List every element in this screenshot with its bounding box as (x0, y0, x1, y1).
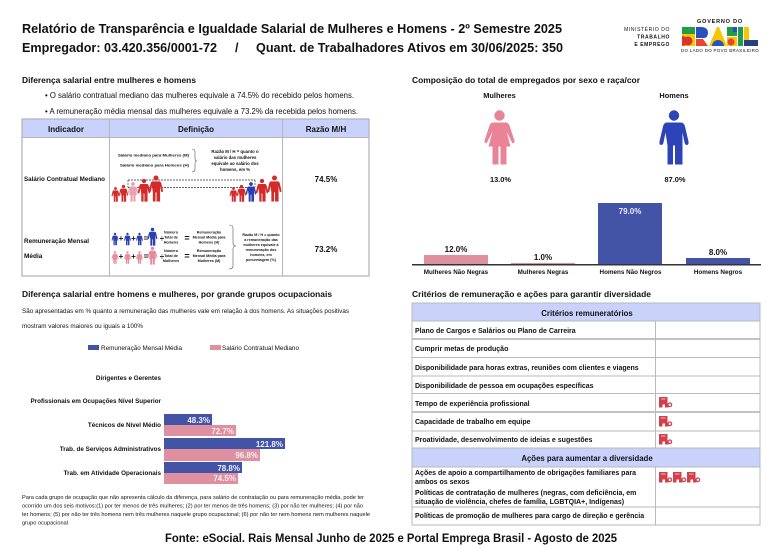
bar chart: grupos ocupacionais: 74.5% (213, 474, 236, 483)
text block: bullets (45, 91, 358, 116)
diagram: remuneração média: + (131, 252, 136, 261)
diagram: remuneração média: + (131, 234, 136, 243)
logo: Ministério do Trabalho e Emprego: E EMPREGO (634, 42, 670, 48)
legend (88, 345, 299, 352)
chart: composição por sexo: 13.0% (490, 175, 511, 184)
legend: Salário Contratual Mediano (222, 345, 299, 352)
text block: nota do gráfico (22, 308, 349, 330)
chart: composição por sexo: 87.0% (665, 175, 686, 184)
diagram: remuneração média: a remuneração das (244, 238, 278, 242)
icon: mulher (484, 110, 515, 164)
diagram: remuneração média: Remuneração (197, 230, 222, 234)
heading: critérios: Critérios de remuneração e ações para garantir diversidade (412, 289, 651, 299)
bar chart: raça/cor: Mulheres Não Negras (424, 269, 489, 276)
table: indicadores: Razão M/H (306, 125, 346, 134)
bar chart: grupos ocupacionais: 96.8% (235, 451, 258, 460)
logo: Governo do Brasil (681, 19, 759, 53)
table: critérios: Proatividade, desenvolvimento de ideias e sugestões (415, 437, 593, 444)
icons: selos ações (659, 472, 700, 482)
diagram: remuneração média: ÷ (160, 234, 165, 243)
bar chart: raça/cor: Homens Não Negros (600, 269, 662, 276)
text block: nota de rodapé: grupo ocupacional (22, 520, 68, 526)
logo: Ministério do Trabalho e Emprego (624, 26, 670, 48)
diagram: remuneração média: ÷ (160, 252, 165, 261)
chart: composição por sexo: Homens (659, 91, 689, 100)
bar chart: grupos ocupacionais: Técnicos de Nível Médio (88, 422, 161, 429)
bar chart: grupos ocupacionais: 48.3% (187, 416, 210, 425)
text block: nota de rodapé: Para cada grupo de ocupação que não apresenta cálculo da diferença, para salário de contratação ou para remuneração média, pode ter (22, 495, 364, 501)
chart: composição por sexo: Mulheres (483, 91, 516, 100)
table: indicadores: 73.2% (315, 245, 337, 254)
table: indicadores: Salário Contratual Mediano (24, 176, 105, 183)
table: critérios: ambos os sexos (415, 479, 470, 486)
diagram: remuneração média: Total de (164, 254, 178, 258)
table: indicadores (22, 119, 369, 276)
logo: Governo do Brasil: GOVERNO DO (697, 19, 743, 25)
logo: Ministério do Trabalho e Emprego: MINISTÉRIO DO (624, 26, 670, 33)
bar chart: raça/cor: 8.0% (709, 248, 727, 257)
title: / (235, 41, 239, 55)
table: critérios: Ações de apoio a compartilhamento de obrigações familiares para (415, 470, 636, 477)
diagram: remuneração média: Homens (164, 240, 178, 244)
text block: nota do gráfico: mostram valores maiores ou iguais a 100% (22, 323, 143, 330)
diagram: remuneração média (112, 225, 280, 269)
diagram: remuneração média: Remuneração (197, 249, 222, 253)
table: critérios: Capacidade de trabalho em equipe (415, 419, 531, 426)
text block: nota de rodapé: ter homens; (5) por não ter três homens nem três mulheres naquele grupo ocupacional; (6) por não ter nem homens nem mulheres naquele (22, 512, 370, 518)
bar chart: raça/cor: Homens Negros (694, 269, 743, 276)
logo: Ministério do Trabalho e Emprego: TRABALHO (637, 34, 670, 40)
diagram: salário mediano: salário das mulheres (214, 155, 257, 160)
title: Relatório de Transparência e Igualdade Salarial de Mulheres e Homens - 2º Semestre 2025 (22, 22, 562, 36)
bar chart: grupos ocupacionais: 72.7% (211, 427, 234, 436)
table: critérios: Políticas de promoção de mulheres para cargo de direção e gerência (415, 513, 644, 520)
bar chart: grupos ocupacionais: Trab. de Serviços Administrativos (60, 446, 161, 453)
diagram: remuneração média: Mulheres (M) (198, 259, 221, 263)
diagram: remuneração média: Mulheres (163, 259, 179, 263)
table: critérios: Tempo de experiência profissional (415, 401, 530, 408)
table: indicadores: Indicador (48, 125, 84, 134)
legend: Remuneração Mensal Média (101, 345, 182, 352)
bar chart: raça/cor (412, 203, 761, 276)
heading: grupos ocupacionais: Diferença salarial entre homens e mulheres, por grande grupos ocupacionais (22, 289, 332, 299)
diagram: salário mediano: Salário mediano para Homens (H) (120, 162, 190, 168)
heading: composição: Composição do total de empregados por sexo e raça/cor (412, 75, 641, 85)
diagram: remuneração média: Total de (164, 236, 178, 240)
diagram: remuneração média: Número (164, 249, 179, 253)
bar chart: raça/cor: 79.0% (619, 207, 641, 216)
heading: diferença salarial: Diferença salarial entre mulheres e homens (22, 75, 196, 85)
bar chart: grupos ocupacionais: Profissionais em Ocupações Nível Superior (30, 398, 162, 405)
title: Empregador: 03.420.356/0001-72 (22, 41, 217, 55)
diagram: remuneração média: = (184, 233, 190, 243)
table: critérios: situação de violência, chefes de família, LGBTQIA+, Indígenas) (415, 499, 624, 506)
diagram: remuneração média: Razão M / H = quanto (242, 233, 280, 237)
diagram: remuneração média: homens, em (250, 253, 272, 257)
text block: bullets: • O salário contratual mediano das mulheres equivale a 74.5% do recebido pelos homens. (45, 91, 354, 100)
diagram: remuneração média: mulheres equivale à (243, 243, 280, 247)
table: critérios: Ações para aumentar a diversidade (521, 454, 653, 463)
icon: selo capacidade (659, 416, 672, 426)
diagram: remuneração média: + (119, 252, 124, 261)
bar chart: raça/cor: 1.0% (534, 253, 552, 262)
diagram: salário mediano (112, 149, 282, 202)
bar chart: grupos ocupacionais (30, 375, 285, 484)
bar chart: grupos ocupacionais: 78.8% (217, 464, 240, 473)
text block: nota do gráfico: São apresentadas em % quanto a remuneração das mulheres vale em relação à dos homens. As situações positivas (22, 308, 349, 315)
icon: homem (659, 110, 689, 164)
table: critérios (412, 303, 760, 525)
diagram: remuneração média: Homens (H) (199, 240, 220, 244)
diagram: salário mediano: Razão M / H = quanto o (211, 149, 259, 154)
diagram: remuneração média: Mensal Média para (193, 236, 226, 240)
diagram: remuneração média: = (144, 252, 149, 261)
diagram: salário mediano: Salário mediano para Mulheres (M) (118, 152, 190, 158)
table: indicadores: Definição (178, 125, 214, 134)
bar chart: raça/cor: Mulheres Negras (518, 269, 569, 276)
table: critérios: Disponibilidade de pessoa em ocupações específicas (415, 383, 594, 390)
table: critérios: Disponibilidade para horas extras, reuniões com clientes e viagens (415, 365, 639, 372)
table: critérios: Plano de Cargos e Salários ou Plano de Carreira (415, 328, 576, 335)
table: critérios: Políticas de contratação de mulheres (negras, com deficiência, em (415, 490, 636, 497)
table: indicadores: Média (24, 253, 43, 260)
table: critérios: Critérios remuneratórios (541, 309, 633, 318)
bar chart: grupos ocupacionais: Trab. em Atividade Operacionais (64, 470, 161, 477)
footer: fonte: Fonte: eSocial. Rais Mensal Junho de 2025 e Portal Emprega Brasil - Agosto de 2025 (165, 533, 618, 545)
diagram: remuneração média: Mensal Média para (193, 254, 226, 258)
logo: Governo do Brasil: DO LADO DO POVO BRASILEIRO (681, 48, 759, 53)
diagram: remuneração média: porcentagem (%) (246, 258, 277, 262)
bar chart: grupos ocupacionais: Dirigentes e Gerentes (96, 375, 161, 382)
text block: nota de rodapé: ocorrido um dos seis motivos:(1) por ter menos de três mulheres; (2) por ter menos de três homens; (3) por não ter mulheres; (4) por não (22, 504, 363, 510)
diagram: remuneração média: = (144, 234, 149, 243)
table: indicadores: Remuneração Mensal (24, 238, 89, 245)
title (22, 22, 563, 55)
diagram: remuneração média: Número (164, 230, 179, 234)
table: indicadores: 74.5% (315, 175, 337, 184)
diagram: salário mediano: equivale ao salário dos (211, 161, 259, 166)
table: critérios: Cumprir metas de produção (415, 346, 508, 353)
chart: composição por sexo (483, 91, 689, 184)
diagram: remuneração média: = (184, 251, 190, 261)
bar chart: raça/cor: 12.0% (445, 245, 467, 254)
bar chart: grupos ocupacionais: 121.8% (256, 440, 283, 449)
icon: selo proatividade (659, 434, 672, 444)
text block: nota de rodapé (22, 495, 370, 526)
diagram: remuneração média: + (119, 234, 124, 243)
diagram: remuneração média: remuneração dos (246, 248, 276, 252)
icon: selo tempo de experiência (659, 397, 672, 408)
title: Quant. de Trabalhadores Ativos em 30/06/2025: 350 (256, 41, 563, 55)
diagram: salário mediano: homens, em % (220, 167, 250, 172)
text block: bullets: • A remuneração média mensal das mulheres equivale a 73.2% da recebida pelos homens. (45, 107, 358, 116)
